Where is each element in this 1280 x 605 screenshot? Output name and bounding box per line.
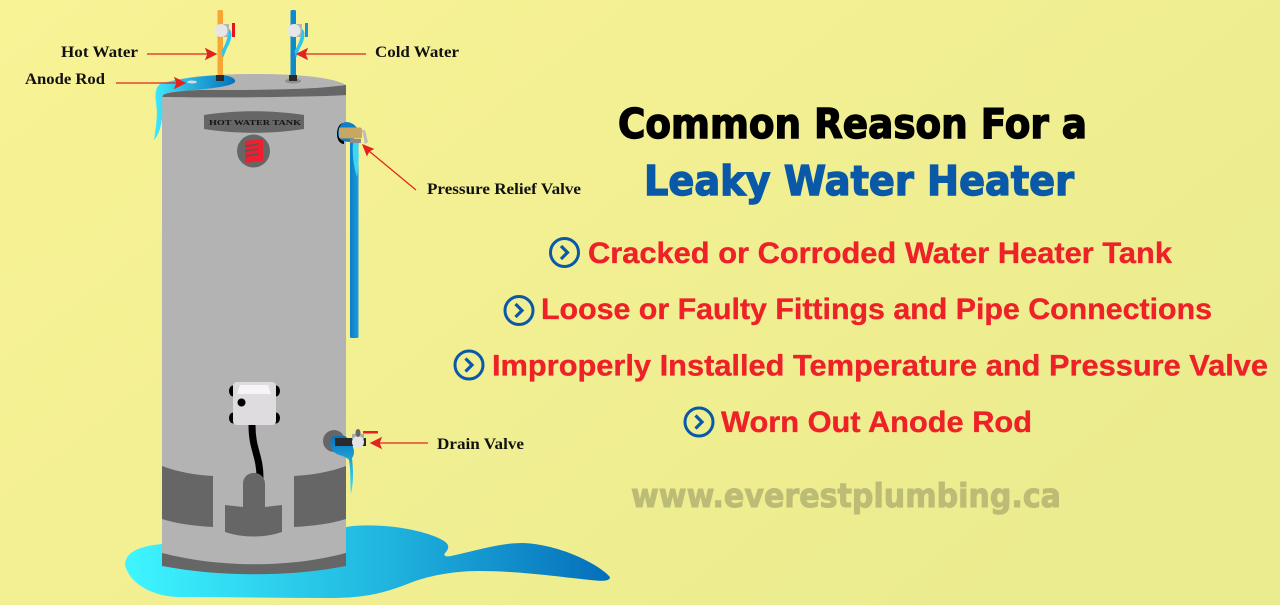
list item 4: Worn Out Anode Rod bbox=[721, 406, 1032, 439]
water puddle bbox=[125, 525, 610, 598]
lid dark band bbox=[162, 85, 346, 97]
label: anode rod bbox=[25, 71, 185, 88]
arrow: drain valve bbox=[371, 438, 428, 448]
arrow: cold water bbox=[297, 49, 366, 59]
arrow: pressure relief valve bbox=[363, 145, 416, 190]
label: hot water bbox=[61, 44, 216, 61]
thermostat box bbox=[229, 382, 280, 425]
label: anode rod: Anode Rod bbox=[25, 71, 105, 88]
title: Leaky Water Heater bbox=[644, 157, 1075, 205]
drain valve bbox=[323, 429, 378, 494]
name plate bbox=[204, 111, 304, 133]
label: pressure relief valve: Pressure Relief Valve bbox=[427, 181, 581, 198]
icon: chevron circle bbox=[685, 408, 713, 436]
label: pressure relief valve bbox=[363, 145, 581, 198]
list item 2: Loose or Faulty Fittings and Pipe Connections bbox=[541, 293, 1212, 326]
tank body bbox=[162, 90, 346, 566]
right lower panel bbox=[294, 466, 346, 527]
label: cold water: Cold Water bbox=[375, 44, 459, 61]
label: drain valve bbox=[371, 436, 524, 453]
centre lower panel bbox=[225, 473, 282, 536]
list item 3: Improperly Installed Temperature and Pressure Valve bbox=[492, 350, 1268, 382]
icon: chevron circle bbox=[550, 238, 578, 266]
icon: chevron circle bbox=[505, 296, 533, 324]
water heater tank bbox=[160, 74, 346, 574]
cold water pipe bbox=[285, 10, 308, 84]
water leak on lid bbox=[154, 75, 235, 140]
tank lid bbox=[160, 74, 346, 97]
hot water pipe bbox=[211, 10, 235, 84]
website url: www.everestplumbing.ca bbox=[631, 476, 1061, 515]
pressure relief valve bbox=[337, 122, 368, 338]
title bbox=[618, 100, 1087, 205]
label: cold water bbox=[297, 44, 459, 61]
left lower panel bbox=[162, 466, 213, 527]
list item 1: Cracked or Corroded Water Heater Tank bbox=[588, 237, 1173, 270]
discharge pipe bbox=[350, 140, 358, 338]
arrow: anode rod bbox=[116, 78, 185, 88]
label: hot water: Hot Water bbox=[61, 44, 138, 61]
power cable bbox=[252, 425, 260, 478]
label: drain valve: Drain Valve bbox=[437, 436, 524, 453]
name plate: HOT WATER TANK bbox=[209, 119, 302, 127]
icon: chevron circle bbox=[455, 351, 483, 379]
bottom band bbox=[162, 553, 346, 574]
brand badge bbox=[237, 134, 270, 168]
title: Common Reason For a bbox=[618, 100, 1087, 148]
arrow: hot water bbox=[147, 49, 216, 59]
